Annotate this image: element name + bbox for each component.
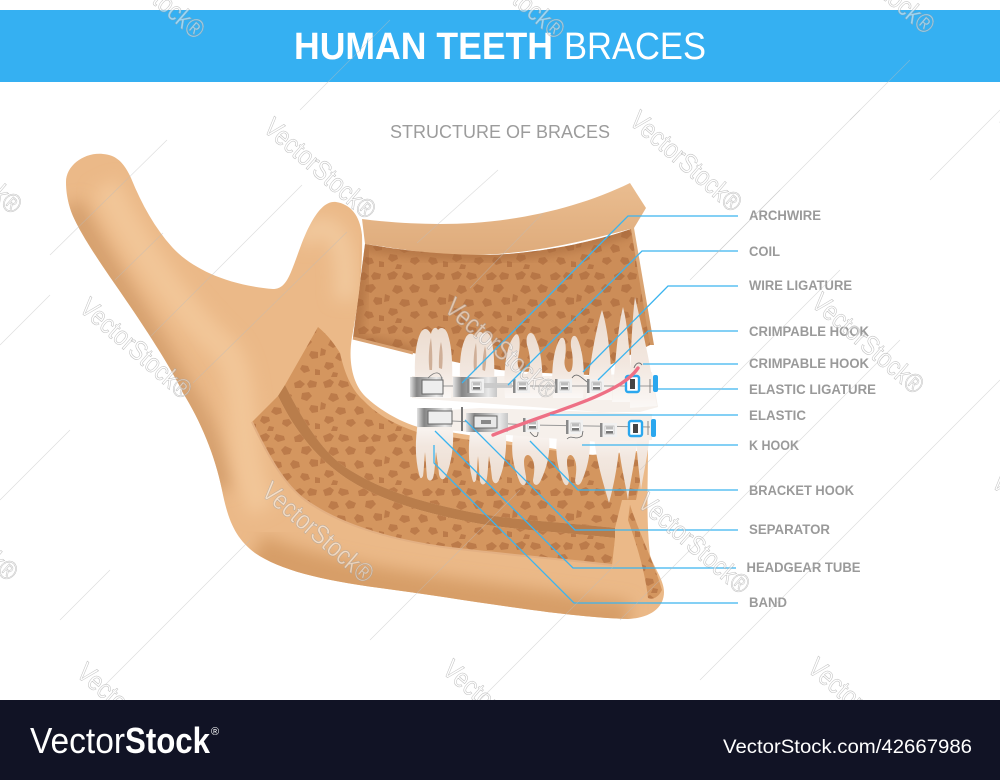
callout labels <box>746 208 876 610</box>
lower crown band <box>417 408 652 442</box>
footer logo: Stock <box>125 720 211 761</box>
upper second band <box>453 377 497 397</box>
crimpable hook <box>634 363 642 368</box>
watermark overlay: VectorStock® <box>624 105 748 218</box>
callout labels: CRIMPABLE HOOK <box>749 356 869 371</box>
callout labels: CRIMPABLE HOOK <box>749 324 869 339</box>
lower archwire <box>452 421 650 427</box>
upper archwire <box>443 385 653 387</box>
watermark overlay: VectorStock® <box>256 476 380 589</box>
callout labels: BAND <box>749 595 787 610</box>
upper molar band <box>410 373 443 397</box>
upper brackets <box>513 375 604 393</box>
footer logo <box>30 720 219 761</box>
crown band <box>412 372 658 412</box>
callout labels: ARCHWIRE <box>749 208 821 223</box>
subtitle: STRUCTURE OF BRACES <box>390 122 610 142</box>
upper spongy bone <box>353 229 650 375</box>
lower molar band <box>417 408 452 427</box>
header banner: BRACES <box>564 26 706 68</box>
watermark overlay: VectorStock® <box>806 287 930 400</box>
chin spongy bone <box>628 505 662 599</box>
header banner: HUMAN TEETH <box>294 26 553 68</box>
lower second band <box>466 413 508 432</box>
elastic ligature, upper <box>653 375 658 392</box>
footer logo: Vector <box>30 720 125 761</box>
lower blue bracket <box>629 421 648 436</box>
callout labels: HEADGEAR TUBE <box>746 560 860 575</box>
elastic band <box>493 368 638 435</box>
upper blue bracket <box>626 376 650 393</box>
callout labels: SEPARATOR <box>749 522 830 537</box>
watermark overlay: VectorStock® <box>632 487 756 600</box>
lower spongy bone, lower section <box>252 396 615 565</box>
watermark overlay: VectorStock® <box>258 112 382 225</box>
elastic ligature, lower <box>651 419 656 437</box>
separator <box>461 407 463 431</box>
callout leader lines <box>434 216 738 603</box>
jaw illustration <box>66 154 664 622</box>
teeth <box>412 297 658 503</box>
coil <box>484 383 512 388</box>
header banner <box>0 10 1000 82</box>
footer bar <box>0 700 1000 780</box>
callout labels: BRACKET HOOK <box>749 483 854 498</box>
lower teeth <box>416 422 650 503</box>
braces hardware <box>410 363 658 439</box>
callout labels: ELASTIC LIGATURE <box>749 382 876 397</box>
mandible body <box>66 154 664 622</box>
lower brackets <box>523 418 617 439</box>
callout labels: WIRE LIGATURE <box>749 278 852 293</box>
watermark overlay: VectorStock® <box>439 292 563 405</box>
footer id: VectorStock.com/42667986 <box>723 737 972 758</box>
watermark overlay: VectorStock® <box>74 292 198 405</box>
watermark overlay: VectorStock® <box>802 652 926 765</box>
callout labels: ELASTIC <box>749 408 806 423</box>
upper bone strip <box>362 183 654 345</box>
callout labels: K HOOK <box>749 438 799 453</box>
footer logo: ® <box>211 726 219 738</box>
lower spongy bone, upper section <box>285 327 646 528</box>
upper teeth <box>415 297 657 408</box>
callout labels: COIL <box>749 244 780 259</box>
nerve canal band <box>278 385 615 538</box>
